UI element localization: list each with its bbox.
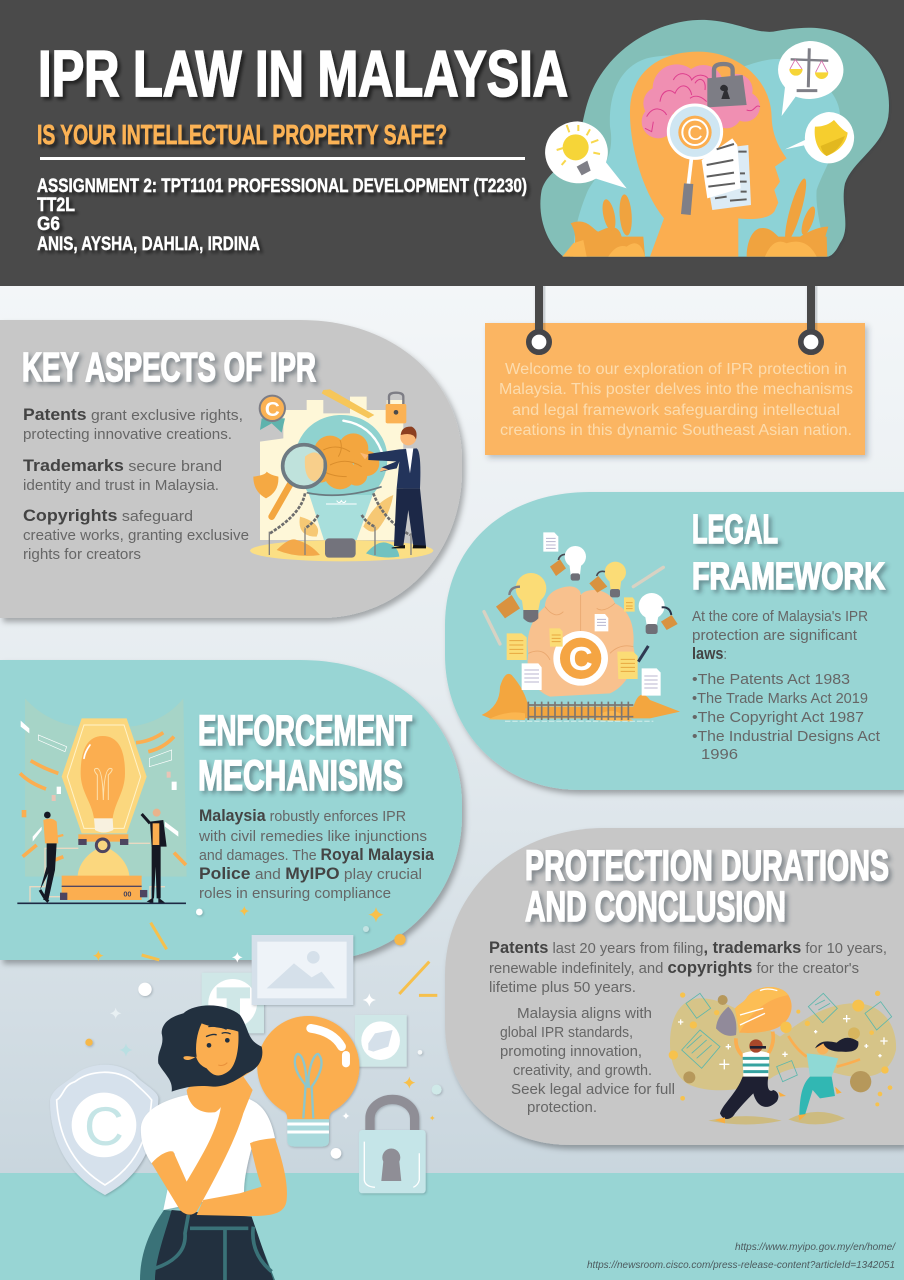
assignment details: ANIS, AYSHA, DAHLIA, IRDINA	[37, 234, 260, 255]
icon: shield with copyright: C	[84, 1095, 124, 1157]
magnifier	[272, 482, 292, 517]
hair	[158, 1005, 262, 1092]
white plus marks	[678, 1015, 888, 1069]
enforcement text: with civil remedies like injunctions	[198, 828, 427, 845]
right eyelet	[801, 332, 821, 352]
welcome text: Welcome to our exploration of IPR protection in	[505, 361, 847, 378]
icon: type tile	[202, 973, 264, 1033]
locks	[496, 595, 520, 618]
conclusion text: Malaysia aligns with	[517, 1005, 652, 1022]
badge	[260, 418, 285, 433]
key aspects text: creative works, granting exclusive	[23, 527, 249, 544]
header edge over hangers	[500, 276, 840, 286]
left arm	[152, 1063, 253, 1215]
header panel	[0, 0, 904, 286]
heading: legal framework	[692, 506, 885, 598]
head silhouette	[630, 52, 787, 257]
panel: enforcement mechanisms	[0, 660, 462, 960]
pencil	[322, 389, 374, 418]
woman runner	[788, 1036, 860, 1067]
illustration: head with brain, lock and copyright: C	[687, 121, 703, 145]
legal framework intro: At the core of Malaysia's IPR	[692, 608, 868, 625]
brain	[307, 433, 379, 489]
jeans	[140, 1210, 275, 1280]
heading: enforcement mechanisms: ENFORCEMENT	[198, 707, 412, 755]
panel: legal framework	[445, 492, 904, 790]
key aspects text: Patents grant exclusive rights,	[23, 405, 243, 424]
magnifier	[688, 157, 692, 185]
source links: https://www.myipo.gov.my/en/home/	[735, 1241, 896, 1253]
legal framework intro	[692, 608, 868, 663]
assignment details: G6	[37, 214, 60, 235]
enforcement text	[198, 806, 434, 902]
enforcement text: roles in ensuring compliance	[199, 885, 391, 902]
decorative ribbons	[20, 733, 186, 865]
lock	[389, 393, 403, 405]
source links: https://newsroom.cisco.com/press-release-content?articleId=1342051	[587, 1259, 895, 1271]
list of laws: •The Industrial Designs Act	[692, 728, 881, 745]
icon: picture frame	[252, 935, 353, 1005]
icon: shield with copyright	[50, 1065, 158, 1195]
list of laws: •The Trade Marks Act 2019	[692, 690, 868, 707]
left hanger	[535, 280, 543, 335]
illustration: head with brain, lock and copyright	[540, 20, 889, 257]
icon: light bulb	[257, 1016, 359, 1147]
foliage	[570, 177, 828, 257]
illustration: hexagon bulb and two figures: 00	[123, 890, 131, 899]
heading: enforcement mechanisms: MECHANISMS	[198, 752, 403, 800]
right arm	[197, 1138, 287, 1216]
pencils	[633, 567, 663, 587]
source links	[587, 1241, 896, 1271]
ground line	[17, 901, 186, 906]
conclusion text: Seek legal advice for full	[511, 1081, 675, 1098]
bubble: light bulb	[545, 121, 627, 188]
protection durations text: renewable indefinitely, and copyrights for the creator's	[489, 958, 859, 977]
assignment details	[37, 176, 527, 255]
padlock	[714, 64, 733, 78]
welcome text	[499, 361, 853, 439]
heading: key aspects: KEY ASPECTS OF IPR	[22, 344, 316, 390]
welcome text: Malaysia. This poster delves into the mechanisms	[499, 381, 853, 398]
key aspects text: rights for creators	[23, 546, 141, 563]
dots	[669, 991, 892, 1106]
conclusion text: creativity, and growth.	[513, 1062, 652, 1079]
icon: padlock	[359, 1099, 426, 1193]
bulb and megaphone	[735, 987, 792, 1033]
icon: pen nib tile	[355, 1015, 407, 1067]
conclusion text: protection.	[527, 1099, 597, 1116]
shield	[253, 472, 278, 498]
illustration: hexagon bulb and two figures	[17, 698, 187, 903]
assignment details: ASSIGNMENT 2: TPT1101 PROFESSIONAL DEVELOPMENT (T2230)	[37, 176, 527, 197]
enforcement text: Police and MyIPO play crucial	[199, 864, 422, 883]
face	[183, 1023, 239, 1075]
list of laws: 1996	[701, 746, 738, 763]
list of laws: •The Patents Act 1983	[692, 671, 850, 688]
illustration: brain, bulbs and copyright	[482, 532, 680, 722]
shirt	[141, 1095, 275, 1210]
bubble: shield	[785, 112, 854, 163]
key aspects text: Copyrights safeguard	[23, 506, 193, 525]
man	[394, 488, 426, 546]
list of laws	[692, 671, 881, 763]
figure right	[150, 820, 167, 847]
welcome text: and legal framework safeguarding intellectual	[512, 402, 840, 419]
documents	[543, 532, 558, 552]
chains	[270, 493, 410, 535]
figure: thinking woman	[140, 1005, 287, 1280]
legal framework intro: protection are significant	[692, 627, 858, 644]
documents	[710, 145, 751, 210]
enforcement text: and damages. The Royal Malaysia	[199, 845, 434, 864]
protection durations text: Patents last 20 years from filing, trademarks for 10 years,	[489, 938, 887, 957]
protection durations text	[489, 938, 887, 996]
right hanger	[807, 280, 815, 335]
heading: legal framework: LEGAL	[692, 506, 778, 552]
conclusion text: global IPR standards,	[500, 1024, 633, 1041]
conclusion text	[500, 1005, 675, 1116]
key aspects text	[23, 405, 249, 563]
figure left	[43, 819, 58, 843]
list of laws: •The Copyright Act 1987	[692, 709, 864, 726]
decorative sparkles and dashes	[85, 906, 442, 1159]
key aspects text: identity and trust in Malaysia.	[23, 477, 219, 494]
heading: protection durations	[525, 842, 889, 931]
illustration: brain, bulbs and copyright: C	[569, 641, 593, 678]
enforcement text: Malaysia robustly enforces IPR	[199, 806, 406, 825]
protection durations text: lifetime plus 50 years.	[489, 979, 636, 996]
panel: key aspects	[0, 320, 462, 618]
outlined icons	[682, 993, 892, 1082]
subtitle: IS YOUR INTELLECTUAL PROPERTY SAFE?	[37, 119, 447, 150]
illustration: bulb with brain and man: C	[265, 398, 280, 421]
conclusion text: promoting innovation,	[500, 1043, 642, 1060]
key aspects text: Trademarks secure brand	[23, 456, 222, 475]
bulbs	[516, 573, 546, 604]
welcome text: creations in this dynamic Southeast Asian nation.	[500, 422, 852, 439]
panel: protection durations and conclusion	[445, 828, 904, 1145]
header rule	[40, 157, 525, 160]
left eyelet	[529, 332, 549, 352]
teal footer band	[0, 1173, 904, 1280]
legal framework intro: laws:	[692, 644, 727, 663]
title: IPR LAW IN MALAYSIA	[38, 37, 568, 110]
illustration: two people running with bulb	[669, 987, 896, 1124]
man runner	[736, 1032, 773, 1057]
welcome note	[485, 276, 865, 455]
illustration: woman thinking with icons	[50, 906, 442, 1280]
heading: enforcement mechanisms	[198, 707, 412, 800]
illustration: bulb with brain and man	[250, 389, 433, 561]
page background	[0, 286, 904, 1174]
neck	[187, 1077, 227, 1113]
assignment details: TT2L	[37, 195, 75, 216]
key aspects text: protecting innovative creations.	[23, 426, 232, 443]
bubble: scales	[778, 41, 843, 116]
brain	[642, 64, 760, 138]
